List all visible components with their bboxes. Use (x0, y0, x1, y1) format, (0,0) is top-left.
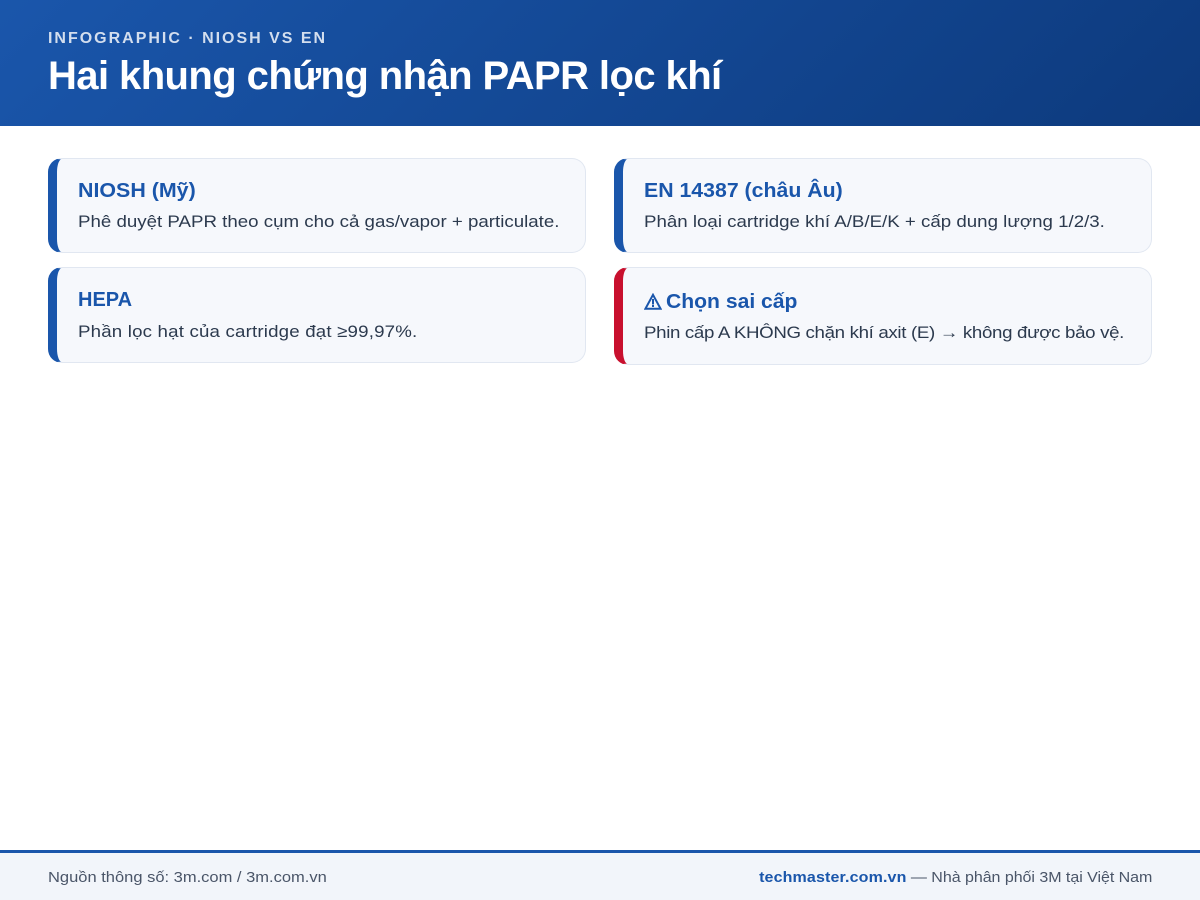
icon: warning triangle (644, 293, 662, 310)
panel: HEPA (48, 267, 586, 363)
title: Hai khung chứng nhận PAPR lọc khí (48, 54, 722, 98)
panel: EN 14387 (614, 158, 1152, 253)
panel: NIOSH (48, 158, 586, 253)
heading: NIOSH: NIOSH (Mỹ) (78, 180, 196, 202)
eyebrow label: INFOGRAPHIC · NIOSH VS EN (48, 30, 327, 47)
heading: warning: Chọn sai cấp (666, 291, 797, 313)
text: warning description: Phin cấp A KHÔNG chặn khí axit (E) → không được bảo vệ. (644, 323, 1124, 342)
heading: EN 14387: EN 14387 (châu Âu) (644, 180, 843, 202)
source note: Nguồn thông số: 3m.com / 3m.com.vn (48, 869, 327, 886)
footer (0, 850, 1200, 900)
header banner (0, 0, 1200, 126)
brand note: techmaster.com.vn — Nhà phân phối 3M tại Việt Nam (759, 869, 1152, 886)
text: HEPA description: Phần lọc hạt của cartridge đạt ≥99,97%. (78, 322, 417, 341)
text: EN 14387 description: Phân loại cartridge khí A/B/E/K + cấp dung lượng 1/2/3. (644, 212, 1105, 231)
text: NIOSH description: Phê duyệt PAPR theo cụm cho cả gas/vapor + particulate. (78, 212, 559, 231)
panel: warning (614, 267, 1152, 365)
heading: HEPA: HEPA (78, 289, 132, 311)
